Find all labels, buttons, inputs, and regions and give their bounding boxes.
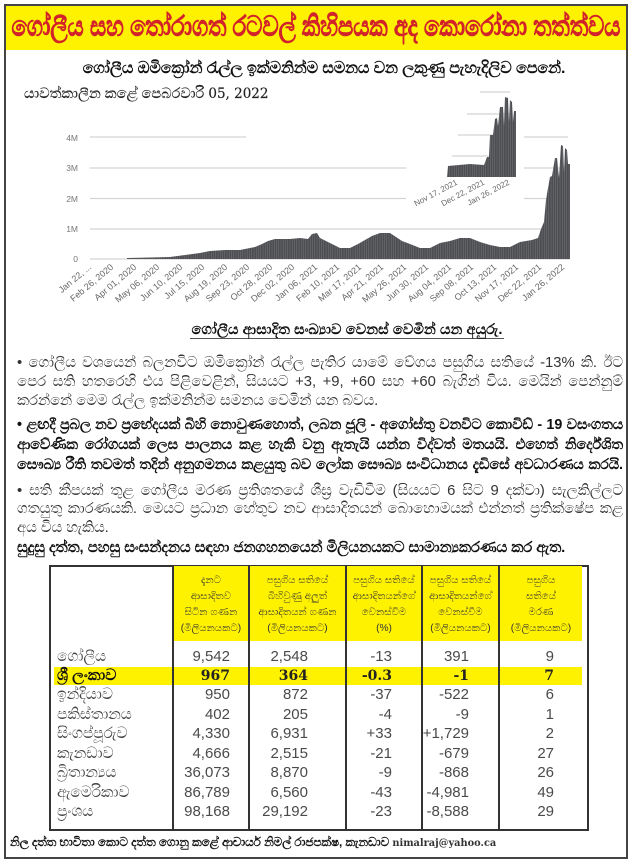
x axis labels: Feb 10, 2021 (294, 262, 341, 304)
x axis labels: Aug 04, 2021 (406, 262, 453, 304)
line chart: global cases (57, 91, 570, 305)
paragraph: death rate: ගතයුතු කාරණයකි. මෙයට ප්‍රධාන හේතුව නව ආසාදිතයන් බොහොමයක් එන්නත් ප්‍රතික්ෂේප කළ (17, 501, 623, 517)
x axis labels: Jan 22, ... (57, 262, 93, 295)
paragraph: expert view: ආවේණික රෝගයක් ලෙස පාලනය කළ හැකි වනු ඇතැයි යන්න විද්වත් මතයයි. එහෙත් නිර්දේශිත (17, 437, 623, 453)
data table: 6,931 (270, 725, 308, 742)
x axis labels: May 06, 2020 (113, 262, 161, 305)
data table: -679 (439, 745, 469, 762)
data table: ශ්‍රී ලංකාව (57, 667, 116, 684)
data table: 4,330 (192, 725, 230, 742)
data table: 1 (546, 706, 554, 723)
inset x axis labels: Dec 22, 2021 (440, 178, 486, 208)
data table: මරණ (529, 607, 553, 618)
x axis labels: Mar 17, 2021 (316, 262, 363, 304)
data table: 2 (546, 725, 554, 742)
data table: -4 (379, 706, 392, 723)
data table: ඉන්දියාව (57, 686, 113, 703)
data table: 4,666 (192, 745, 230, 762)
x axis labels: Oct 13, 2021 (452, 262, 498, 303)
gridlines (90, 92, 570, 259)
y axis labels: 3M (66, 163, 78, 173)
column headers: සිටින ගණන (185, 607, 237, 618)
data table: 29 (537, 803, 554, 820)
data table: -8,588 (426, 803, 469, 820)
x axis labels: Sep 08, 2021 (428, 262, 475, 304)
x axis labels: Apr 21, 2021 (339, 262, 385, 303)
x axis labels: Apr 01, 2020 (92, 262, 138, 303)
column: new cases: 2,548 (270, 648, 308, 665)
data table: පසුගිය (527, 575, 555, 586)
y axis labels (66, 133, 78, 264)
data table: සිංගප්පූරුව (57, 725, 127, 742)
paragraph: expert view: • ළඟදී ප්‍රබල නව ප්‍රභේදයක් බිහි නොවුණහොත්, ලබන ජූලි - අගෝස්තු වනවිට කොවිඩ් - 19 වසංගතය (17, 417, 623, 433)
data table: (මිලියනයකට) (511, 623, 571, 634)
data table: -1 (453, 668, 469, 684)
data table: 950 (205, 686, 230, 703)
paragraph: weekly trend: • ගෝලීය වශයෙන් බලනවිට ඔමික්‍රෝන් රැල්ල පැතිර යාමේ වේගය පසුගිය සතියේ -13% කි. ඊට (17, 355, 623, 371)
data table: වෙනස්වීම (438, 607, 483, 618)
paragraph: expert view (17, 416, 624, 474)
x axis labels: Jun 30, 2021 (384, 262, 430, 303)
data table: 86,789 (184, 784, 230, 801)
y axis labels: 0 (73, 254, 78, 264)
data table: ආසාදිතයන්ගේ (353, 591, 415, 602)
data table: -9 (379, 764, 392, 781)
data table: -4,981 (426, 784, 469, 801)
data table: ආසාදිතයන්ගේ (429, 591, 492, 602)
column: deaths: 9 (546, 648, 554, 665)
data table: -23 (370, 803, 392, 820)
y axis labels: 2M (66, 194, 78, 204)
data table: -868 (439, 764, 469, 781)
data table: -522 (439, 686, 469, 703)
column headers: (මිලියනයකට) (181, 623, 241, 634)
x axis labels: Nov 17, 2021 (473, 262, 520, 304)
data table: ආසාදිතයන් ගණන (258, 607, 337, 618)
paragraph: death rate (17, 482, 623, 536)
data table: 29,192 (262, 803, 308, 820)
data table: 8,870 (270, 764, 308, 781)
data table: +1,729 (423, 725, 469, 742)
source credit: නිල දත්ත භාවිතා කොට දත්ත ගොනු කළේ ආචාර්ය නිමල් රාජපක්ෂ, කැනඩාව nimalraj@yahoo.ca (10, 835, 496, 849)
x axis labels: Jun 10, 2020 (138, 262, 184, 303)
x axis labels: Feb 26, 2020 (68, 262, 115, 304)
data table: -0.3 (362, 668, 392, 684)
data table: ඇමෙරිකාව (57, 784, 129, 801)
data table: 49 (537, 784, 554, 801)
x axis labels: Jan 26, 2022 (520, 262, 566, 303)
column: active cases: 9,542 (192, 648, 230, 665)
data table: 402 (205, 706, 230, 723)
paragraph: expert view: සෞඛ්‍ය රීති තවමත් තදින් අනුගමනය කළයුතු බව ලෝක සෞඛ්‍ය සංවිධානය දැඩිසේ අවධාරණය කරයි. (17, 457, 623, 473)
x axis labels: Dec 02, 2020 (249, 262, 296, 304)
data table: 6 (546, 686, 554, 703)
x axis labels: Dec 22, 2021 (496, 262, 543, 304)
title banner (6, 6, 626, 50)
data table: කැනඩාව (57, 745, 113, 762)
column headers: දැනට (201, 575, 221, 586)
data table: -37 (370, 686, 392, 703)
data table: ප්‍රංශය (57, 803, 93, 820)
column headers (181, 575, 241, 634)
data table: 205 (283, 706, 308, 723)
data table: 98,168 (184, 803, 230, 820)
data table: (මිලියනයකට) (430, 623, 491, 634)
data table: -9 (456, 706, 469, 723)
Sri Lanka highlight (54, 667, 582, 685)
column headers: ආසාදිතව (191, 591, 231, 602)
paragraph: weekly trend: පෙර සති හතරෙහි එය පිළිවෙළින්, සියයට +3, +9, +60 සහ +60 බැගින් විය. මෙයින් පෙන්නුම් (17, 374, 623, 390)
x axis labels: Jan 06, 2021 (273, 262, 319, 303)
x axis labels: Aug 19, 2020 (182, 262, 229, 304)
data table: වෙනස්වීම (362, 607, 406, 618)
update date: යාවත්කාලීන කළේ පෙබරවාරි 05, 2022 (24, 86, 268, 102)
x axis labels: Sep 23, 2020 (204, 262, 251, 304)
data table: සතියේ (526, 591, 556, 602)
data table: බ්‍රිතාන්‍යය (57, 764, 116, 781)
x axis labels (57, 262, 566, 305)
title: ගෝලීය සහ තෝරාගත් රටවල් කිහිපයක අද කොරෝනා තත්ත්වය (12, 11, 620, 42)
data table: පසුගිය සතියේ (267, 575, 328, 586)
data table: 364 (279, 668, 308, 684)
data table: 26 (537, 764, 554, 781)
data table: 36,073 (184, 764, 230, 781)
x axis labels: May 26, 2021 (360, 262, 408, 305)
inset x axis labels: Jan 26, 2022 (466, 178, 511, 207)
x axis labels: Oct 28, 2020 (228, 262, 274, 303)
data table: බිහිවුණු අලුත් (268, 591, 327, 602)
data table: පසුගිය සතියේ (353, 575, 415, 586)
column: change per million: 391 (444, 648, 469, 665)
country names: ගෝලීය (57, 648, 106, 665)
data table: 872 (283, 686, 308, 703)
paragraph: weekly trend (17, 354, 623, 409)
data table: 27 (537, 745, 554, 762)
data table: 6,560 (270, 784, 308, 801)
data table: (%) (376, 623, 392, 634)
data table: 7 (544, 668, 554, 684)
data table: -43 (370, 784, 392, 801)
paragraph: death rate: • සති කීපයක් තුළ ගෝලීය මරණ ප්‍රතිශතයේ ශීඝ්‍ර වැඩිවීම (සියයට 6 සිට 9 දක්වා) සැලකිල්ලට (17, 483, 623, 499)
chart caption: ගෝලීය ආසාදිත සංඛ්‍යාව වෙනස් වෙමින් යන අයුරු. (191, 322, 502, 338)
y axis labels: 1M (66, 224, 78, 234)
data table: -21 (370, 745, 392, 762)
paragraph: weekly trend: කරන්නේ මෙම රැල්ල ඉක්මනින්ම සමනය වෙමින් යන බවය. (17, 393, 378, 409)
data table: 2,515 (270, 745, 308, 762)
data table: +33 (367, 725, 392, 742)
data table: පකිස්තානය (57, 706, 132, 723)
inset chart: recent surge (447, 97, 516, 177)
data table: 967 (201, 668, 230, 684)
paragraph: death rate: අය විය හැකිය. (17, 520, 109, 536)
inset x axis labels: Nov 17, 2021 (413, 178, 459, 208)
inset x axis labels (413, 178, 511, 208)
subtitle: ගෝලීය ඔමික්‍රෝන් රැල්ල ඉක්මනින්ම සමනය වන ලකුණු පැහැදිලිව පෙනේ. (83, 60, 565, 77)
y axis labels: 4M (66, 133, 78, 143)
table note: සුදුසු දත්ත, පහසු සංසන්දනය සඳහා ජනගහනයෙන් මිලියනයකට සාමාන්‍යකරණය කර ඇත. (17, 540, 565, 556)
x axis labels: Jul 15, 2020 (162, 262, 206, 301)
header fill (173, 566, 582, 641)
data table: පසුගිය සතියේ (430, 575, 491, 586)
bars: main daily cases (127, 145, 570, 259)
column: change percent: -13 (370, 648, 392, 665)
data table: (මිලියනයකට) (267, 623, 328, 634)
